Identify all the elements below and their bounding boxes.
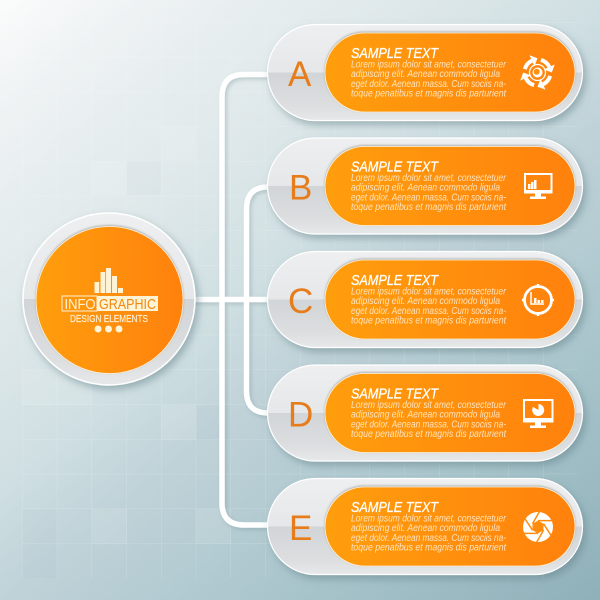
text block C: adipiscing elit. Aenean commodo ligula	[351, 296, 500, 307]
text block B	[351, 158, 507, 213]
text block E	[351, 499, 507, 554]
text block C: Lorem ipsum dolor sit amet, consectetuer	[351, 286, 507, 298]
text block E: SAMPLE TEXT	[351, 499, 440, 516]
text block A: toque penatibus et magnis dis parturient	[351, 88, 507, 100]
text block C: SAMPLE TEXT	[351, 272, 440, 289]
logo wordmark	[62, 296, 158, 313]
text block D: toque penatibus et magnis dis parturient	[351, 429, 507, 440]
logo wordmark: GRAPHIC	[99, 296, 156, 313]
central circle badge	[23, 213, 195, 385]
text block C: toque penatibus et magnis dis parturient	[351, 316, 507, 326]
text block A: adipiscing elit. Aenean commodo ligula	[351, 69, 500, 80]
text block E: toque penatibus et magnis dis parturient	[351, 542, 507, 554]
text block D: eget dolor. Aenean massa. Cum sociis na-	[351, 420, 507, 430]
icon: bar chart logo	[94, 268, 123, 293]
icon: cycle arrows	[520, 55, 555, 90]
text block B: eget dolor. Aenean massa. Cum sociis na-	[351, 192, 507, 204]
three dots	[94, 326, 122, 332]
letter A: A	[288, 55, 312, 94]
panel: B	[268, 138, 582, 234]
icon: camera aperture	[523, 512, 553, 542]
text block D	[351, 386, 507, 440]
logo wordmark: INFO	[64, 296, 96, 313]
text block A	[351, 45, 507, 100]
text block E: Lorem ipsum dolor sit amet, consectetuer	[351, 514, 507, 524]
icon: circled chart	[522, 284, 554, 316]
text block D: adipiscing elit. Aenean commodo ligula	[351, 410, 500, 420]
letter D: D	[288, 396, 313, 434]
text block B: toque penatibus et magnis dis parturient	[351, 202, 507, 213]
panel: D	[268, 365, 582, 461]
text block D: SAMPLE TEXT	[351, 386, 440, 402]
text block C: eget dolor. Aenean massa. Cum sociis na-	[351, 306, 507, 317]
panel: C	[268, 252, 582, 348]
panel: A	[268, 24, 582, 120]
text block A: SAMPLE TEXT	[351, 45, 440, 62]
text block B: adipiscing elit. Aenean commodo ligula	[351, 182, 500, 194]
connector lines	[190, 74, 270, 525]
text block A: eget dolor. Aenean massa. Cum sociis na-	[351, 79, 507, 90]
letter B: B	[289, 168, 312, 208]
icon: monitor with pie	[523, 399, 554, 428]
text block E: adipiscing elit. Aenean commodo ligula	[351, 523, 500, 534]
letter C: C	[288, 282, 313, 321]
icon: monitor with bars	[524, 173, 552, 199]
text block D: Lorem ipsum dolor sit amet, consectetuer	[351, 400, 507, 411]
letter E: E	[289, 509, 312, 548]
subtitle: DESIGN ELEMENTS	[70, 314, 148, 325]
text block A: Lorem ipsum dolor sit amet, consectetuer	[351, 60, 507, 70]
panel: E	[268, 478, 582, 574]
text block B: Lorem ipsum dolor sit amet, consectetuer	[351, 173, 507, 184]
text block B: SAMPLE TEXT	[351, 158, 440, 176]
text block C	[351, 272, 507, 326]
text block E: eget dolor. Aenean massa. Cum sociis na-	[351, 533, 507, 544]
